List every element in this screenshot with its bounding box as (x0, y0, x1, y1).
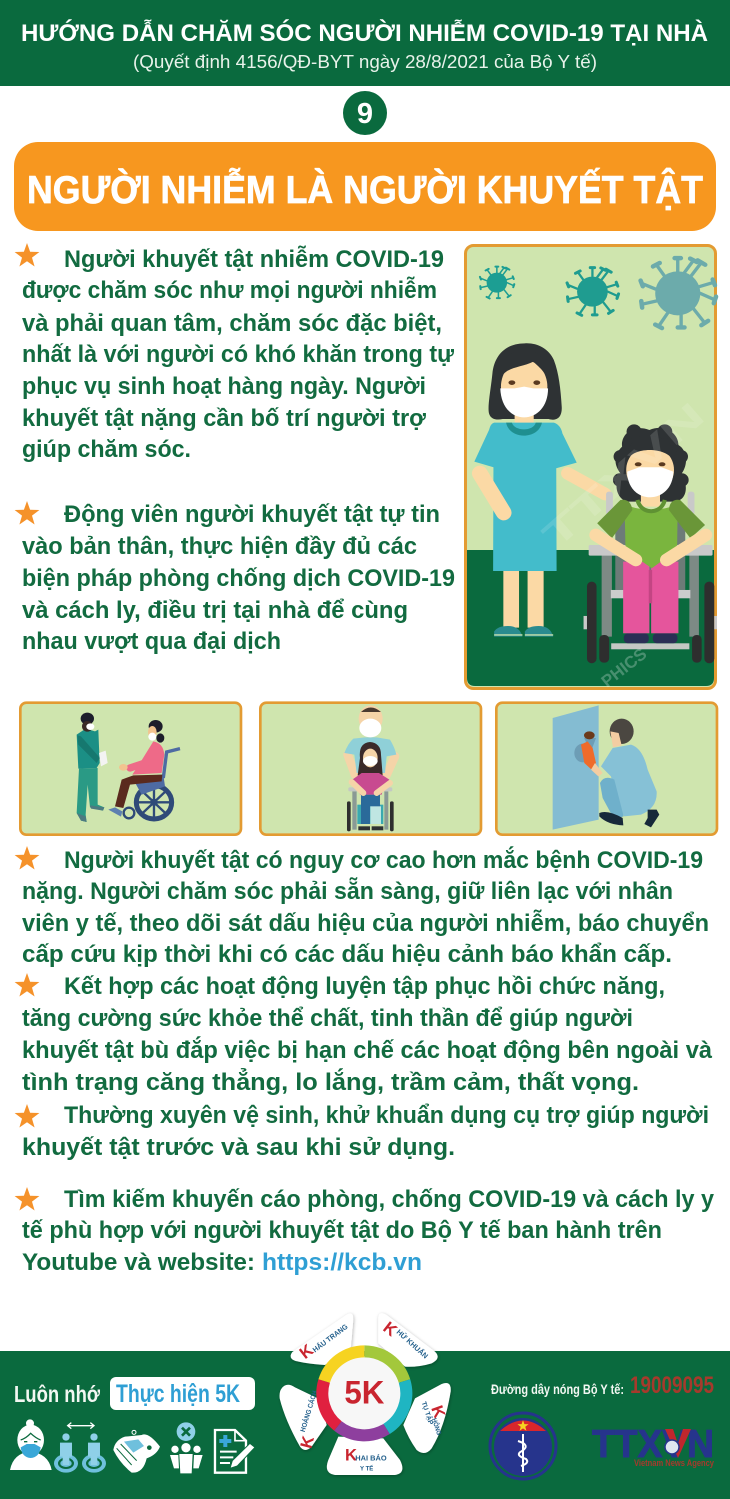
icon: star (15, 1104, 39, 1128)
text block: third paragraph: nặng. Người chăm sóc phải sẵn sàng, giữ liên lạc với nhân (22, 877, 673, 905)
petal: khai báo y tế (327, 1437, 402, 1475)
petal: khoảng cách (280, 1385, 327, 1450)
text block: second paragraph: vào bản thân, thực hiện đầy đủ các (22, 533, 417, 560)
logo: Ministry of Health (490, 1413, 556, 1479)
text block: third paragraph: viên y tế, theo dõi sát dấu hiệu của người nhiễm, báo chuyển (22, 909, 709, 937)
petal: không tụ tập: HÔNG (430, 1417, 444, 1436)
icon: star (15, 846, 39, 870)
header band (0, 0, 730, 86)
text block: first paragraph: giúp chăm sóc. (22, 436, 191, 463)
header title: HƯỚNG DẪN CHĂM SÓC NGƯỜI NHIỄM COVID-19 TẠI NHÀ (21, 18, 708, 47)
hotline: Đường dây nóng Bộ Y tế: (491, 1381, 624, 1397)
text block: fourth paragraph (15, 973, 713, 1096)
number badge 9: 9 (357, 98, 373, 130)
icon: washing hands (113, 1430, 160, 1473)
icon: star (15, 501, 39, 524)
footer band (0, 1351, 730, 1499)
text block: second paragraph: và cách ly, điều trị tại nhà để cùng (22, 597, 408, 624)
text block: second paragraph: nhau vượt qua đại dịch (22, 628, 281, 655)
petal: khử khuẩn: HỬ KHUẨN (395, 1327, 430, 1360)
kneeling person (599, 719, 659, 827)
petal: khẩu trang: HẨU TRANG (311, 1322, 350, 1354)
petal: không tụ tập: K (427, 1403, 449, 1421)
5K badge (280, 1313, 451, 1475)
logo: TTXVN: Vietnam News Agency (634, 1458, 714, 1468)
woman in wheelchair (584, 424, 717, 663)
text block: second paragraph: biện pháp phòng chống dịch COVID-19 (22, 565, 455, 592)
logo: TTXVN: TTXVN (592, 1423, 714, 1466)
text block: sixth paragraph with link: https://kcb.vn (262, 1249, 422, 1276)
text block: fourth paragraph: tăng cường sức khỏe thể chất, tinh thần để giúp người (22, 1005, 633, 1032)
door (553, 705, 599, 830)
petal: khẩu trang: K (296, 1340, 317, 1363)
text block: fourth paragraph: khuyết tật bù đắp việc bị hạn chế các hoạt động bên ngoài và (22, 1036, 713, 1064)
text block: fifth paragraph: Thường xuyên vệ sinh, khử khuẩn dụng cụ trợ giúp người (64, 1102, 709, 1129)
header subtitle: (Quyết định 4156/QĐ-BYT ngày 28/8/2021 của Bộ Y tế) (133, 52, 597, 72)
hotline (491, 1372, 714, 1399)
text block: first paragraph: và phải quan tâm, chăm sóc đặc biệt, (22, 310, 442, 337)
icons: 5K actions (10, 1419, 255, 1473)
petal: khử khuẩn (378, 1313, 438, 1367)
icon: keep distance (54, 1423, 106, 1473)
icon: viruses (480, 258, 716, 328)
text block: sixth paragraph with link: Tìm kiếm khuyến cáo phòng, chống COVID-19 và cách ly y (64, 1186, 715, 1213)
text block: fourth paragraph: Kết hợp các hoạt động luyện tập phục hồi chức năng, (64, 973, 665, 1000)
text block: fifth paragraph (15, 1102, 709, 1161)
door handle and gloved hand (574, 731, 603, 776)
watermark (534, 394, 712, 691)
5K badge: 5K (344, 1375, 384, 1411)
reminder label: Luôn nhớ (14, 1381, 101, 1407)
section title banner (14, 142, 716, 231)
text block: first paragraph: Người khuyết tật nhiễm COVID-19 (64, 245, 444, 273)
5K pill: Thực hiện 5K (116, 1380, 240, 1408)
text block: first paragraph: khuyết tật nặng cần bố trí người trợ (22, 405, 427, 432)
panel: doctor talking with wheelchair user (20, 703, 241, 835)
icon: person wearing mask (10, 1419, 52, 1470)
ring segments (322, 1351, 406, 1435)
text block: first paragraph: được chăm sóc như mọi người nhiễm (22, 276, 437, 304)
text block: fourth paragraph: tình trạng căng thẳng, lo lắng, trầm cảm, thất vọng. (22, 1067, 639, 1096)
petal: khai báo y tế: HAI BÁO (355, 1454, 387, 1463)
text block: sixth paragraph with link (15, 1186, 715, 1276)
panel: person disinfecting a door handle (496, 703, 717, 835)
text block: third paragraph: cấp cứu kịp thời khi có các dấu hiệu cảnh báo khẩn cấp. (22, 941, 672, 968)
petal: khoảng cách: K (297, 1434, 318, 1450)
patient in wheelchair (108, 720, 180, 819)
girl in wheelchair (347, 742, 394, 831)
petal: không tụ tập (403, 1383, 451, 1453)
text block: second paragraph: Động viên người khuyết tật tự tin (64, 501, 440, 528)
number badge 9 (343, 91, 387, 135)
panel: caregiver and woman in wheelchair (466, 246, 717, 691)
standing woman (474, 343, 605, 637)
icon: star (15, 1187, 39, 1210)
text block: second paragraph (15, 501, 455, 655)
petal: khai báo y tế: Y TẾ (360, 1463, 374, 1473)
icon: star (15, 243, 39, 266)
text block: sixth paragraph with link: tế phù hợp với người khuyết tật do Bộ Y tế ban hành trên (22, 1217, 662, 1244)
icon: star (15, 973, 39, 996)
icon: avoid gathering (170, 1422, 203, 1473)
watermark: TTXVN (534, 394, 712, 556)
petal: khoảng cách: HOẢNG CÁCH (298, 1389, 319, 1433)
icon: health declaration form with pencil (215, 1430, 255, 1473)
watermark: PHICS (598, 644, 650, 691)
text block: first paragraph (15, 243, 455, 463)
text block: sixth paragraph with link: Youtube và website: (22, 1249, 255, 1276)
panel: caregiver pushing wheelchair (260, 703, 481, 835)
text block: first paragraph: nhất là với người có khó khăn trong tự (22, 341, 455, 368)
text block: fifth paragraph: khuyết tật trước và sau khi sử dụng. (22, 1134, 455, 1161)
petal: khử khuẩn: K (380, 1318, 401, 1340)
petal: khẩu trang (291, 1313, 353, 1365)
text block: third paragraph (15, 846, 709, 968)
petal: không tụ tập: TỤ TẬP (420, 1400, 436, 1426)
petal: khai báo y tế: K (345, 1445, 357, 1464)
text block: third paragraph: Người khuyết tật có nguy cơ cao hơn mắc bệnh COVID-19 (64, 846, 703, 874)
doctor (77, 713, 108, 822)
caregiver (344, 705, 396, 775)
text block: first paragraph: phục vụ sinh hoạt hàng ngày. Người (22, 373, 426, 400)
